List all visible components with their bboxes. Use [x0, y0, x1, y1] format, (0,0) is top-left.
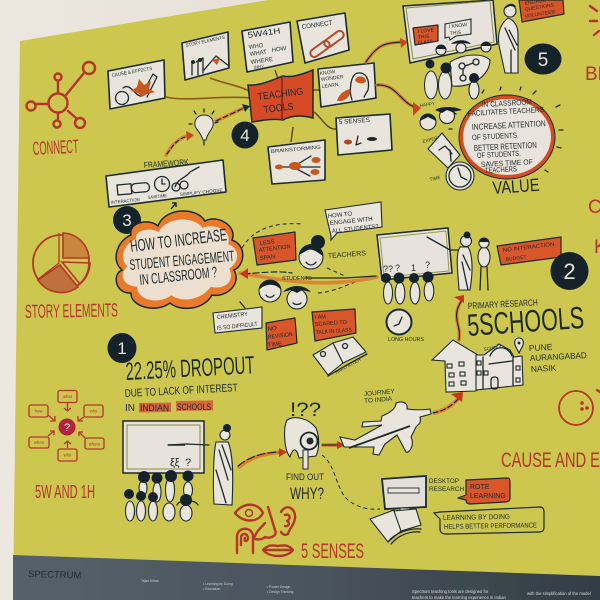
outcomes: happy expert time: EXPERT — [422, 135, 441, 144]
note: no interaction: NO INTERACTION — [503, 242, 555, 254]
outcomes: happy expert time: TIME — [429, 175, 441, 182]
footer description: Spectrum teaching tools are designed for — [412, 589, 489, 594]
dashed link to desktop research — [322, 455, 380, 509]
value circle: TEACHERS — [485, 164, 517, 175]
note: teacher callout — [519, 0, 564, 22]
step 1 badge — [108, 333, 136, 363]
teacher head — [299, 235, 325, 269]
card: 5W 4 1H: WHAT — [249, 50, 268, 58]
note: rote learning: ROTE — [470, 484, 490, 491]
icon: cause and effect ball — [559, 390, 600, 425]
clock: long hours: LONG HOURS — [388, 337, 424, 343]
note: rote learning: LEARNING — [470, 493, 506, 500]
students and question marks middle: 1 — [411, 263, 416, 273]
framework panel: SAVETIME — [148, 193, 167, 200]
students lower: ? — [185, 457, 191, 469]
note: teacher callout: VOLUNTEER — [524, 9, 556, 20]
icon: connect — [26, 62, 95, 128]
footer small labels: • Design Thinking — [267, 590, 293, 594]
label: value: VALUE — [492, 175, 540, 198]
footer description: with the simplification of the model — [527, 591, 591, 596]
bubble: chemistry: IS SO DIFFICULT — [217, 322, 258, 332]
arrow: know wonder learn to outcomes — [377, 85, 421, 116]
bubble: how to engage — [325, 202, 382, 240]
framework panel: SIMPLIFY CHOOSE — [180, 188, 223, 197]
classroom board middle — [377, 228, 452, 280]
open book: boring study: HARD STUDY — [334, 357, 362, 375]
dashed links around teacher — [242, 224, 355, 293]
note: teacher callout: QUESTIONS — [524, 2, 555, 13]
step 2 badge: 2 — [563, 259, 576, 284]
step 4 badge — [232, 122, 258, 148]
card: five senses: 5 SENSES — [339, 117, 371, 126]
heading: primary research: PRIMARY RESEARCH — [468, 297, 538, 311]
icon: airplane — [340, 402, 431, 455]
card: cause and effects: CAUSE & EFFECTS — [111, 66, 153, 79]
icon: 5W and 1H: who — [64, 452, 72, 458]
outcomes: happy expert time: HAPPY — [419, 101, 435, 108]
value circle — [449, 87, 563, 179]
icon: 5W and 1H: why — [90, 408, 98, 414]
students top right — [424, 40, 491, 99]
book: teaching tools: TOOLS — [263, 101, 294, 116]
card: know wonder learn: LEARN — [322, 82, 339, 90]
footer small labels: • Poster Design — [267, 585, 291, 589]
icon: 5W and 1H: ? — [64, 422, 70, 434]
cities list: AURANGABAD — [530, 350, 587, 363]
card: cause and effects — [108, 60, 165, 109]
label: desktop research: RESEARCH — [429, 486, 464, 493]
teacher and pointer lower — [168, 424, 233, 505]
students and question marks middle — [381, 260, 434, 304]
label: find out why: WHY? — [290, 484, 324, 503]
card: 5W 4 1H: 5W41H — [247, 25, 281, 40]
card: 5W 4 1H: WHERE — [250, 57, 273, 66]
icon: light bulb — [189, 109, 218, 145]
card: know wonder learn: KNOW — [320, 69, 336, 77]
board: top right classroom: CLASS — [418, 38, 433, 45]
bubble: chemistry — [213, 302, 262, 333]
subheading: lack of interest: INDIAN — [140, 403, 169, 414]
note: no revision time: TIME — [268, 341, 282, 349]
card: know wonder learn: WONDER — [321, 74, 344, 83]
cloud: how to increase engagement: HOW TO INCREASE — [129, 225, 228, 256]
cities list: NASIK — [531, 363, 557, 374]
label: desktop research: DESKTOP — [429, 478, 459, 485]
card: story elements — [182, 32, 229, 80]
step 3 badge: 3 — [122, 211, 132, 230]
students lower: ξξ — [170, 457, 180, 469]
teacher top right — [499, 4, 518, 73]
subheading: lack of interest: DUE TO LACK OF INTEREST — [125, 382, 238, 400]
arrow: class to find out why — [238, 448, 287, 468]
icon: school building — [432, 340, 523, 392]
label: journey to india: TO INDIA — [364, 396, 393, 405]
student faces — [259, 280, 311, 309]
label: 5W and 1H: 5W AND 1H — [35, 482, 95, 502]
note: rote learning — [458, 478, 510, 504]
step 3 badge — [113, 206, 141, 234]
students and question marks middle: ? — [395, 263, 400, 273]
value circle: FACILITATES TEACHERS — [468, 105, 544, 118]
card: connect — [297, 13, 349, 63]
icon: 5W and 1H: when — [34, 440, 45, 445]
footer description — [412, 589, 591, 600]
bubble: learning by doing — [434, 507, 544, 534]
cloud: how to increase engagement: IN CLASSROOM ? — [139, 264, 218, 289]
card: 5W 4 1H — [242, 22, 293, 72]
icon: 5W and 1H: what — [63, 394, 73, 399]
icon: partial sun top right — [590, 6, 599, 35]
value circle: BETTER RETENTION — [474, 140, 537, 153]
card: connect: CONNECT — [301, 20, 333, 31]
student standing — [478, 238, 490, 290]
card: 5W 4 1H: WHY — [253, 64, 265, 70]
arrow: plane to school — [433, 392, 463, 413]
label: 5 senses: 5 SENSES — [301, 540, 364, 563]
arrow: classroom to question — [240, 268, 377, 283]
cities list — [529, 342, 587, 374]
framework panel: FRAMEWORK — [143, 157, 189, 170]
card: 5W 4 1H: WHO — [248, 43, 264, 51]
outcomes: happy expert time — [419, 101, 474, 190]
subheading: lack of interest: IN — [125, 403, 135, 414]
label: teachers: TEACHERS — [328, 250, 366, 260]
label: journey to india: JOURNEY — [364, 388, 396, 398]
cloud: how to increase engagement: STUDENT ENGAGEMENT — [129, 248, 235, 274]
book: teaching tools: TEACHING — [257, 86, 304, 103]
face: find out why with magnifier: !?? — [290, 400, 321, 421]
connector lines to teaching tools — [166, 70, 336, 142]
icon: school building: SCHOOL — [483, 344, 503, 352]
card: brainstorming — [268, 140, 325, 184]
classroom board lower — [123, 421, 204, 473]
icon: 5W and 1H — [29, 390, 104, 461]
note: less attention span: SPAN — [260, 254, 275, 262]
icon: story elements pie — [33, 233, 90, 293]
board: top right classroom: I KNOW — [449, 22, 468, 30]
value circle: OF STUDENTS. — [472, 131, 519, 142]
board: top right classroom: I LOVE — [418, 27, 435, 35]
step 2 badge — [550, 252, 588, 290]
step 5 badge — [524, 44, 562, 74]
note: no revision time: REVISION — [268, 332, 293, 341]
footer small labels — [141, 579, 293, 594]
note: scared to talk: TALK IN CLASS — [316, 327, 352, 336]
card: 5W 4 1H: HOW — [271, 46, 287, 54]
note: no revision time — [266, 318, 297, 350]
card: story elements: STORY ELEMENTS — [185, 35, 226, 49]
value circle: SAVES TIME OF — [481, 157, 533, 169]
note: scared to talk: SCARED TO — [315, 320, 348, 328]
bubble: chemistry: CHEMISTRY — [217, 312, 248, 321]
icon: monitor desktop research — [382, 476, 426, 512]
label: students: STUDENTS — [282, 276, 312, 282]
subheading: lack of interest — [125, 382, 238, 414]
footer small labels: • Education — [203, 587, 220, 591]
subheading: lack of interest: SCHOOLS — [177, 402, 211, 413]
cities list: PUNE — [529, 342, 553, 353]
label: find out why: FIND OUT — [286, 472, 324, 482]
label: journey to india — [364, 388, 396, 405]
card: five senses — [336, 114, 392, 155]
icon: 5W and 1H: how — [35, 408, 43, 414]
small arrow up — [171, 203, 176, 209]
card: know wonder learn — [318, 63, 376, 107]
label: story elements: STORY ELEMENTS — [25, 300, 118, 323]
board: top right classroom — [403, 0, 497, 63]
students and question marks middle: ? — [383, 264, 388, 274]
students lower — [124, 457, 198, 521]
value circle: OF STUDENTS. — [477, 149, 521, 160]
footer small labels: • Learning by Doing — [203, 582, 233, 586]
note: no interaction — [497, 237, 561, 265]
note: scared to talk — [312, 309, 356, 341]
note: less attention span: ATTENTION — [259, 244, 291, 254]
bubble: learning by doing: LEARNING BY DOING — [443, 514, 510, 522]
note: less attention span: LESS — [260, 239, 275, 247]
icon: location pin — [515, 338, 523, 353]
label: desktop research — [429, 478, 464, 493]
arrow: school to classroom — [454, 295, 464, 340]
framework panel: INTERACTION — [111, 197, 140, 205]
bubble: how to engage: HOW TO — [328, 211, 353, 220]
note: less attention span — [253, 232, 296, 265]
text: CONNECT — [32, 137, 79, 160]
book: teaching tools — [248, 70, 313, 122]
framework panel — [106, 157, 226, 207]
note: no interaction: BUDGET — [506, 254, 527, 263]
footer band — [13, 555, 600, 600]
footer small labels: Tejas Kirtan — [141, 579, 159, 583]
bubble: learning by doing: HELPS BETTER PERFORMANCE — [444, 522, 537, 531]
card: brainstorming: BRAINSTORMING — [271, 145, 321, 155]
label: find out why — [286, 472, 324, 503]
open book: boring study — [313, 337, 367, 376]
icon: 5W and 1H: where — [89, 442, 101, 446]
step 4 badge: 4 — [240, 126, 250, 145]
footer description: teachers to make the learning experience in Indian — [412, 595, 506, 600]
step 5 badge: 5 — [538, 50, 548, 71]
students and question marks middle: ? — [388, 264, 393, 274]
step 1 badge: 1 — [117, 339, 127, 358]
students and question marks middle: ? — [425, 260, 430, 270]
heading: dropout stat: 22.25% DROPOUT — [125, 351, 255, 386]
teacher pointing — [427, 232, 472, 290]
value circle: IN CLASSROOM — [482, 97, 532, 109]
arrow: face to journey — [322, 441, 345, 449]
board: top right classroom: THIS — [450, 30, 462, 37]
icon: five senses — [235, 505, 295, 556]
bubble: how to engage: ALL STUDENTS? — [332, 224, 380, 235]
footer brand: SPECTRUM — [28, 569, 82, 581]
arrow: know wonder learn to board — [366, 38, 408, 62]
cloud: how to increase engagement — [116, 211, 243, 308]
clock: long hours — [386, 310, 424, 343]
arrow: framework to bulb to book — [166, 104, 250, 155]
face: find out why with magnifier — [285, 400, 321, 469]
partial labels at right edge — [585, 64, 600, 258]
board: top right classroom: THIS — [418, 34, 430, 41]
note: scared to talk: I AM — [315, 314, 327, 321]
icon: book open — [370, 509, 421, 544]
note: no revision time: NO — [268, 326, 278, 333]
value circle: INCREASE ATTENTION — [472, 118, 546, 132]
bubble: how to engage: ENGAGE WITH — [330, 217, 373, 227]
